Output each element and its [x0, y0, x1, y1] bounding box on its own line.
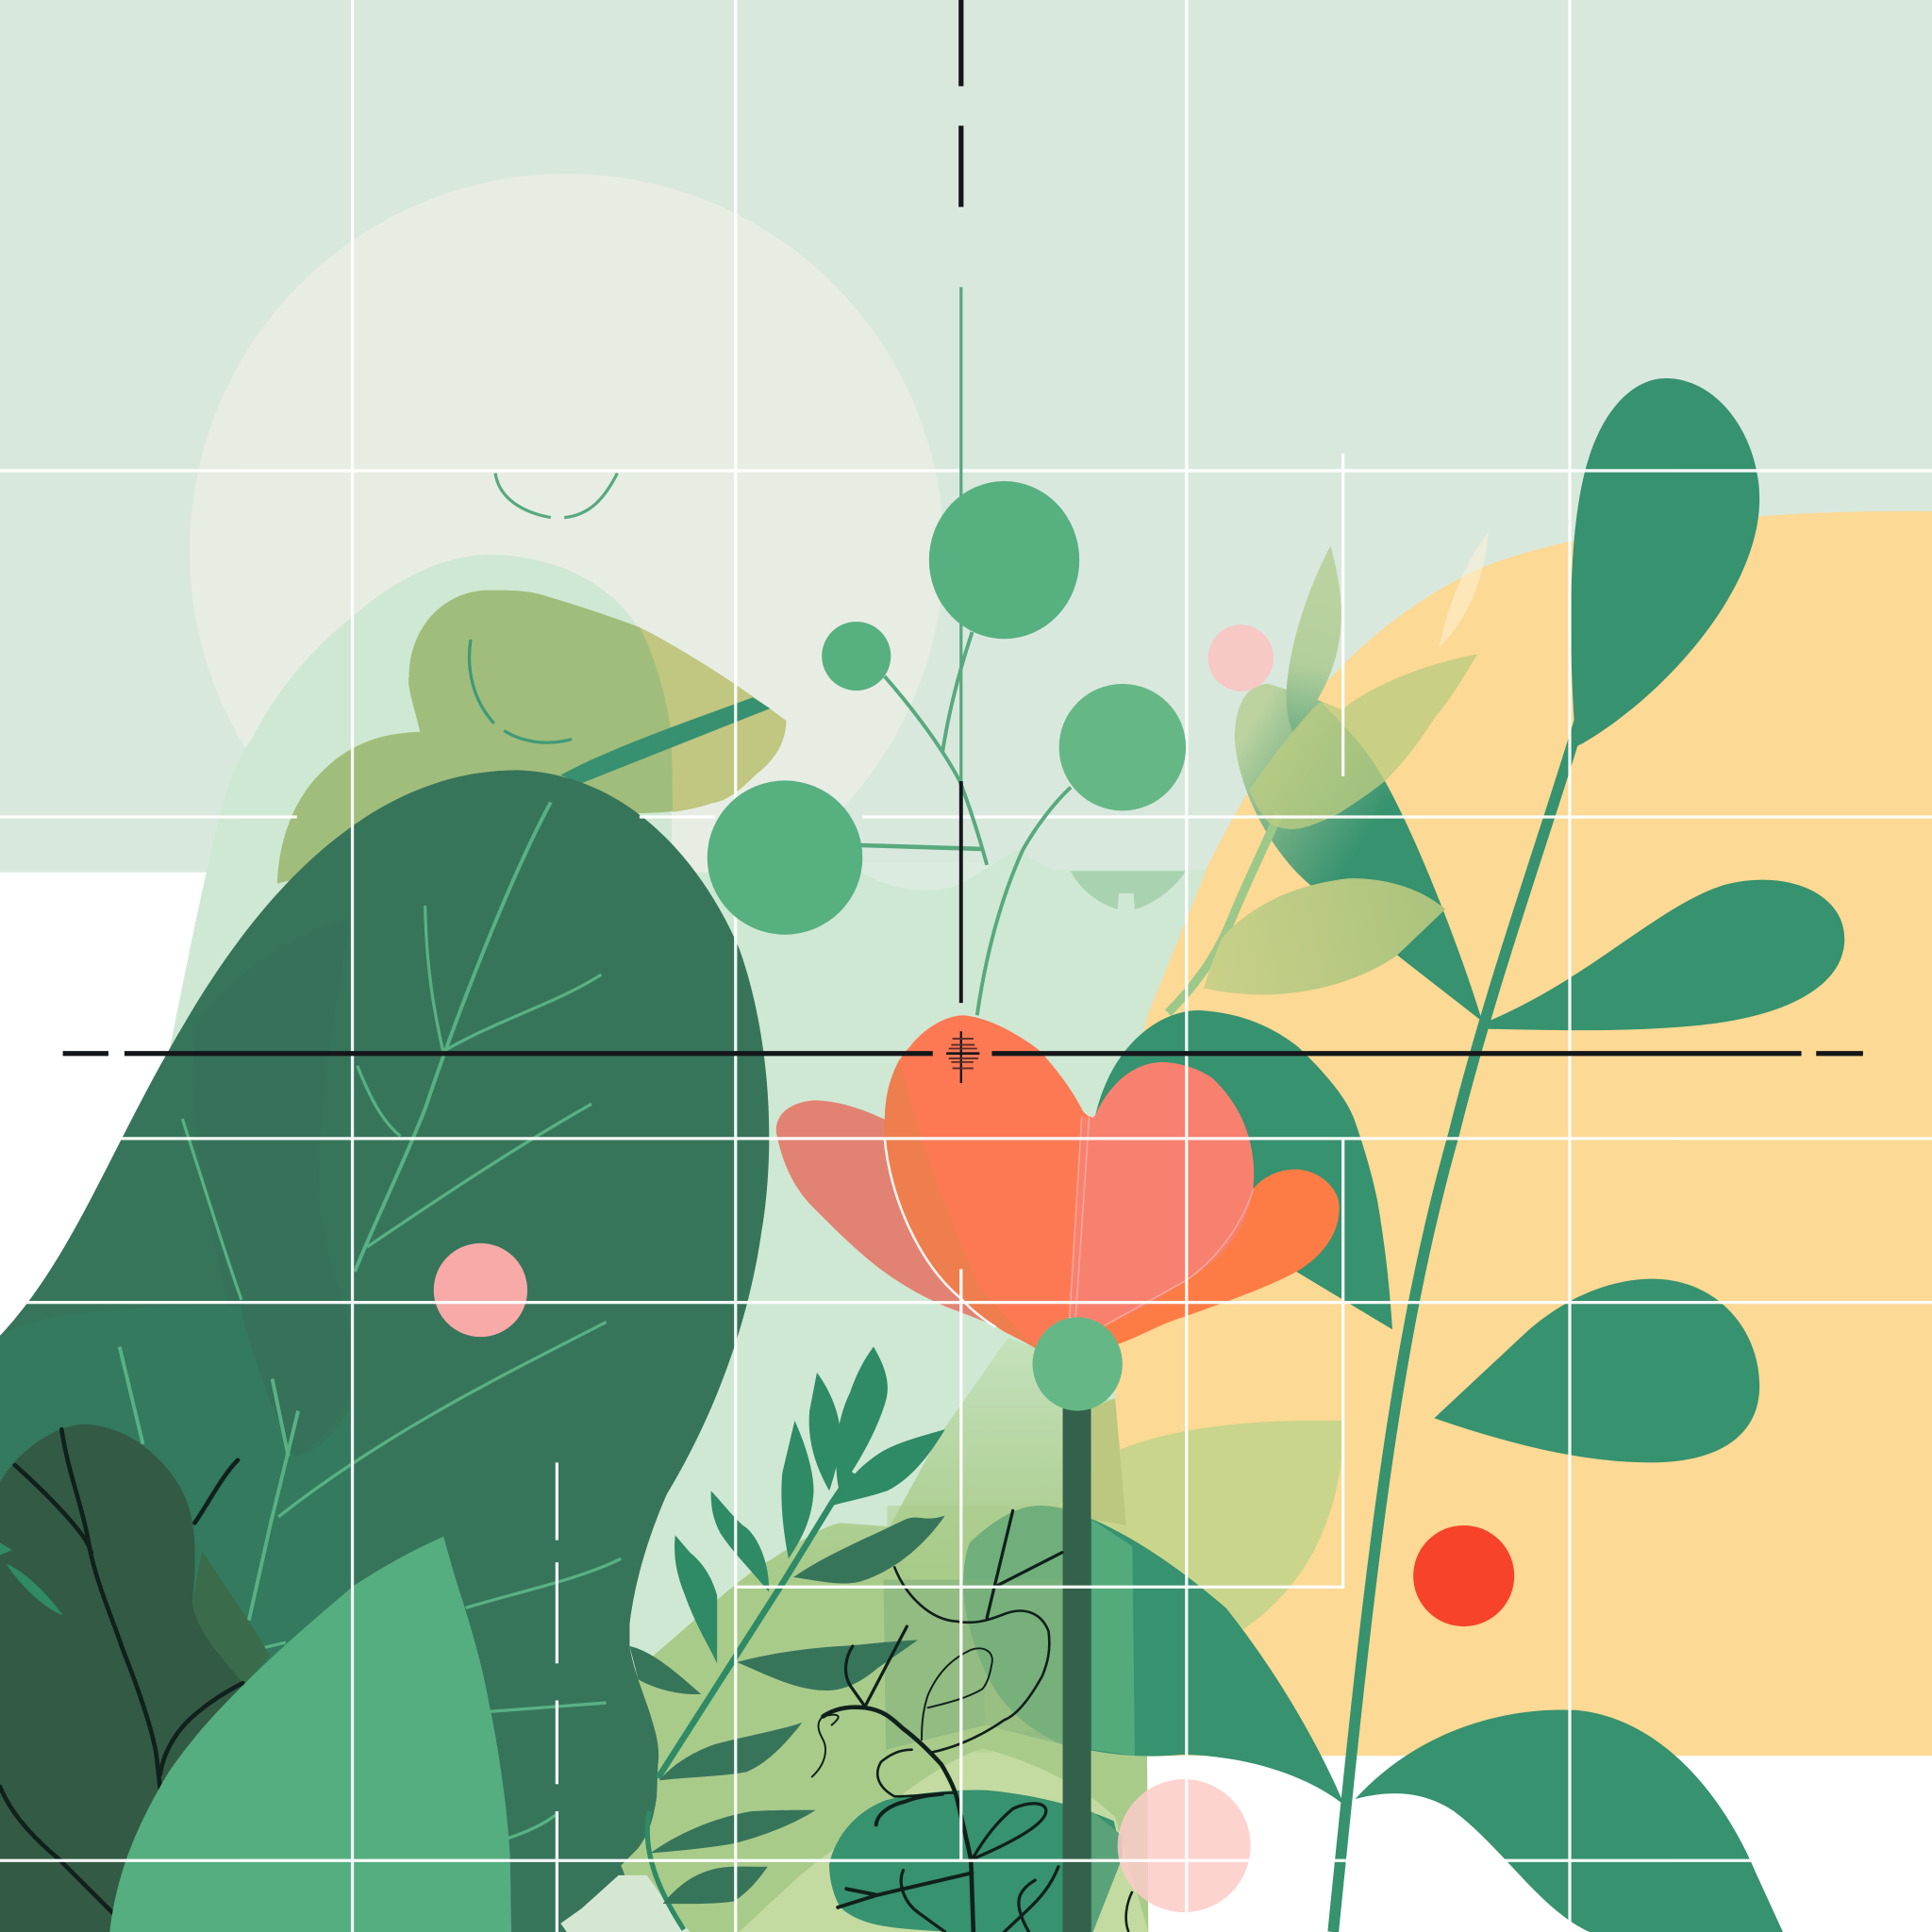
- sprig with leaves: [629, 1347, 945, 1929]
- dark teal central stem: [1063, 1392, 1091, 1932]
- pale fragment at mint edge: [1071, 871, 1185, 909]
- right middle teal leaf: [1485, 880, 1844, 1030]
- teal gradient leaf in the cluster: [1235, 684, 1482, 1022]
- background: yellow hill: [1115, 511, 1932, 1756]
- olive lobe on darkest leaf: [192, 1551, 270, 1684]
- bright green foreground leaf: [109, 1537, 511, 1932]
- olive ground mass: [616, 1338, 1148, 1932]
- teal mound at bottom: [829, 1790, 1123, 1932]
- flower petal: left pink: [776, 1100, 995, 1325]
- teal ground leaf: [963, 1506, 1344, 1805]
- pale pink dot at bottom: [1118, 1779, 1251, 1912]
- pale streak on yellow hill: [1440, 532, 1489, 647]
- green column beside stem over teal leaf: [1091, 1519, 1135, 1756]
- flower petal: lower orange right: [1047, 1170, 1340, 1356]
- petal seam highlight: [1070, 1116, 1253, 1325]
- pale sun circle: [190, 174, 943, 928]
- sprig leaf cluster: [836, 1347, 888, 1491]
- olive leaf veins: [469, 640, 572, 742]
- small sun smile strokes: [495, 474, 617, 518]
- green column over mound: [1091, 1811, 1123, 1932]
- flower petal: central orange: [885, 1015, 1091, 1348]
- darker rectangular band on ground: [883, 1579, 1063, 1750]
- big dark green leaf: [0, 770, 769, 1932]
- balloon large top: [929, 481, 1079, 639]
- right bottom teal leaf: [1356, 1710, 1783, 1932]
- narrow olive leaf: [1287, 546, 1341, 734]
- olive leaf lower right: [1204, 878, 1445, 994]
- balloon lower left: [708, 780, 862, 935]
- olive column beside stem over yellow: [1091, 1398, 1126, 1525]
- black crosshair lines: [63, 0, 1863, 1083]
- pale lower ground: [740, 1748, 1148, 1932]
- small black curve by pink dot: [1126, 1891, 1132, 1932]
- background: pale green sky: [0, 0, 1932, 873]
- olive leaf stem: [560, 697, 770, 784]
- big leaf veins: [120, 802, 621, 1839]
- sprig main stem: [658, 1473, 853, 1778]
- flower petal: darker shade: [885, 1059, 1035, 1348]
- black line art plant: [812, 1510, 1062, 1932]
- balloon right: [1059, 684, 1186, 810]
- thin olive stem: [1168, 813, 1279, 1013]
- dark leaf black veins: [0, 1429, 242, 1913]
- darker blob on big leaf: [194, 918, 354, 1457]
- petal edge highlight: [885, 1139, 995, 1327]
- balloon small: [822, 622, 891, 691]
- red dot: [1413, 1525, 1514, 1626]
- dark leaf small green marks: [0, 1542, 63, 1615]
- teal leaf behind flower: [1094, 1010, 1392, 1329]
- pale mint backdrop shape: [170, 555, 1207, 1932]
- right lower teal leaf: [1434, 1279, 1759, 1462]
- flower petal: right salmon: [1070, 1062, 1254, 1325]
- translucent olive band over ground leaf: [887, 1506, 1063, 1752]
- olive leaf lighter tip: [640, 627, 786, 812]
- green balloons cluster: [708, 287, 1186, 1015]
- teal tint lower left of big leaf: [0, 1306, 351, 1923]
- balloon stems: [861, 287, 1071, 1015]
- olive leaf behind flower: [984, 1421, 1344, 1730]
- pink dot upper: [1208, 625, 1274, 691]
- pale bud patch at bottom of big leaf: [560, 1875, 690, 1932]
- right top teal leaf: [1571, 378, 1759, 747]
- right tall teal stem: [1333, 721, 1579, 1932]
- olive leaf behind big leaf: [277, 591, 786, 883]
- pink dot on big leaf: [434, 1243, 527, 1337]
- stem node circle: [1033, 1317, 1123, 1411]
- background: pale dip under sky: [850, 862, 1023, 899]
- darkest leaf lower left: [0, 1424, 244, 1932]
- olive leaf upper right: [1249, 655, 1477, 829]
- sprig lower curved stem: [647, 1811, 684, 1929]
